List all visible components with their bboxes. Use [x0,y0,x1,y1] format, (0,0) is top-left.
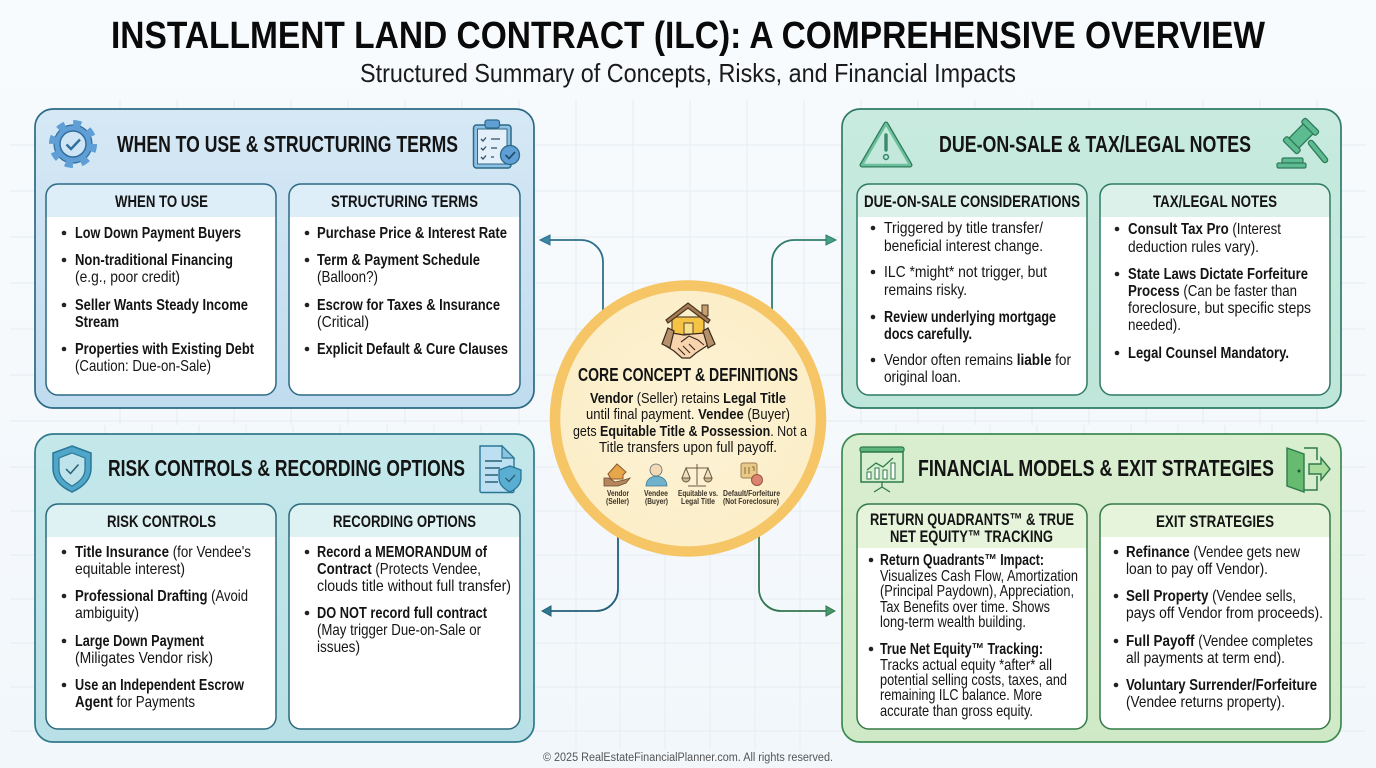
bullet list: Legal Counsel Mandatory. [1128,345,1289,362]
card: return quadrants and true net equity tracking [857,504,1087,729]
card heading: RECORDING OPTIONS [333,512,476,531]
bullet list: pays off Vendor from proceeds). [1126,605,1323,622]
bullet list [869,552,1078,720]
bullet list: Vendor often remains liable for [884,352,1071,369]
card: when to use [46,184,276,395]
card heading: TAX/LEGAL NOTES [1153,192,1277,211]
bullet list [305,225,508,358]
bullet list: Explicit Default & Cure Clauses [317,341,508,358]
icon: warning triangle [862,124,910,165]
card heading [870,510,1074,546]
bullet list: Seller Wants Steady Income [75,297,248,314]
bullet list: (Balloon?) [317,269,378,286]
card: recording options [289,504,520,729]
bullet list [1115,221,1311,362]
icon: shield with check [53,446,91,492]
bullet list: Contract (Protects Vendee, [317,561,481,578]
definition text [573,391,808,456]
arrow: core to financial models [759,530,835,616]
bullet list: Triggered by title transfer/ [884,220,1044,237]
bullet list [1114,544,1323,711]
bullet list: Use an Independent Escrow [75,677,245,694]
card: structuring terms [289,184,520,395]
bullet list: Stream [75,314,119,331]
bullet list: Agent for Payments [75,694,195,711]
bullet list: Term & Payment Schedule [317,252,480,269]
label: vendor [606,489,629,506]
panel: when to use and structuring terms [35,109,534,408]
bullet list: Review underlying mortgage [884,309,1056,326]
icon: document with shield [480,446,521,492]
definition text: Vendor (Seller) retains Legal Title [590,391,786,407]
bullet list: (May trigger Due-on-Sale or [317,622,481,639]
bullet list: (Vendee returns property). [1126,694,1285,711]
label: vendee: Vendee [644,489,669,498]
bullet list: State Laws Dictate Forfeiture [1128,266,1308,283]
card: tax/legal notes [1100,184,1330,395]
bullet list: Non-traditional Financing [75,252,233,269]
footer: © 2025 RealEstateFinancialPlanner.com. All rights reserved. [543,752,833,764]
definition text: until final payment. Vendee (Buyer) [586,407,790,423]
label: equitable vs legal title: Equitable vs. [678,489,718,498]
icon: scales [682,464,712,486]
definition text: Title transfers upon full payoff. [599,440,777,456]
definition text: gets Equitable Title & Possession. Not a [573,424,808,440]
bullet list: (e.g., poor credit) [75,269,180,286]
bullet list: long-term wealth building. [880,614,1026,631]
card heading: WHEN TO USE [115,192,208,211]
arrow: core to when to use [540,235,603,312]
bullet list [62,225,255,375]
bullet list: beneficial interest change. [884,238,1043,255]
bullet list: Title Insurance (for Vendee's [75,544,251,561]
bullet list: all payments at term end). [1126,650,1285,667]
bullet list: Return Quadrants™ Impact: [880,552,1044,569]
label: equitable vs legal title: Legal Title [681,497,716,506]
card heading: STRUCTURING TERMS [331,192,478,211]
bullet list: remains risky. [884,282,967,299]
heading: DUE-ON-SALE & TAX/LEGAL NOTES [939,131,1251,157]
bullet list: (Critical) [317,314,369,331]
bullet list: (Principal Paydown), Appreciation, [880,583,1074,600]
bullet list: Process (Can be faster than [1128,283,1297,300]
bullet list: Full Payoff (Vendee completes [1126,633,1313,650]
bullet list: Tax Benefits over time. Shows [880,599,1050,616]
card: exit strategies [1100,504,1330,729]
bullet list: Escrow for Taxes & Insurance [317,297,500,314]
panel: core concept and definitions [555,286,821,552]
bullet list: Tracks actual equity *after* all [880,657,1052,674]
bullet list [871,220,1071,386]
arrow: core to risk controls [542,530,618,616]
label: vendee [644,489,669,506]
panel: financial models and exit strategies [842,434,1341,742]
bullet list: True Net Equity™ Tracking: [880,641,1043,658]
bullet list: deduction rules vary). [1128,239,1259,256]
icon: gear with check [52,123,94,165]
icon: presentation board with chart [860,447,904,492]
bullet list: needed). [1128,317,1181,334]
bullet list: ambiguity) [75,605,139,622]
bullet list: (Caution: Due-on-Sale) [75,358,211,375]
label: default and forfeiture: Default/Forfeiture [723,489,781,498]
icon: gavel [1277,118,1325,168]
label: default and forfeiture [723,489,781,506]
label: vendor: (Seller) [606,497,629,506]
bullet list: Record a MEMORANDUM of [317,544,488,561]
card: risk controls [46,504,276,729]
card: due-on-sale considerations [857,184,1087,395]
heading: FINANCIAL MODELS & EXIT STRATEGIES [918,455,1274,481]
heading: RISK CONTROLS & RECORDING OPTIONS [108,455,465,481]
bullet list: docs carefully. [884,326,972,343]
icon: vendee [646,464,667,486]
card heading: DUE-ON-SALE CONSIDERATIONS [864,192,1080,211]
icon: default and forfeiture [741,463,762,486]
label: equitable vs legal title [678,489,718,506]
heading: WHEN TO USE & STRUCTURING TERMS [117,131,458,157]
icon: exit door with arrow [1287,448,1330,492]
bullet list [62,544,251,711]
bullet list: Professional Drafting (Avoid [75,588,248,605]
bullet list: foreclosure, but specific steps [1128,300,1311,317]
panel: due-on-sale and tax/legal notes [842,109,1341,408]
bullet list: Large Down Payment [75,633,205,650]
card heading: EXIT STRATEGIES [1156,512,1274,531]
icon: house with handshake [662,303,715,358]
bullet list: Purchase Price & Interest Rate [317,225,507,242]
icon: vendor [604,464,630,486]
card heading: NET EQUITY™ TRACKING [890,527,1053,546]
heading: CORE CONCEPT & DEFINITIONS [578,364,798,385]
bullet list: loan to pay off Vendor). [1126,561,1268,578]
bullet list: Refinance (Vendee gets new [1126,544,1300,561]
bullet list: issues) [317,639,360,656]
subtitle: Structured Summary of Concepts, Risks, and Financial Impacts [360,58,1016,88]
bullet list: Consult Tax Pro (Interest [1128,221,1282,238]
bullet list: Properties with Existing Debt [75,341,255,358]
bullet list: potential selling costs, taxes, and [880,672,1067,689]
bullet list: (Miligates Vendor risk) [75,650,213,667]
label: default and forfeiture: (Not Foreclosure) [723,497,779,506]
card heading: RISK CONTROLS [107,512,216,531]
icon: clipboard with check [474,120,520,168]
arrow: core to due-on-sale [772,235,836,312]
bullet list: Sell Property (Vendee sells, [1126,588,1296,605]
bullet list: DO NOT record full contract [317,605,488,622]
bullet list: original loan. [884,369,961,386]
bullet list [305,544,511,656]
card heading: RETURN QUADRANTS™ & TRUE [870,510,1074,529]
bullet list: remaining ILC balance. More [880,687,1042,704]
bullet list: Visualizes Cash Flow, Amortization [880,568,1078,585]
bullet list: accurate than gross equity. [880,703,1033,720]
panel: risk controls and recording options [35,434,534,742]
bullet list: ILC *might* not trigger, but [884,264,1048,281]
bullet list: Low Down Payment Buyers [75,225,241,242]
label: vendor: Vendor [607,489,629,498]
label: vendee: (Buyer) [645,497,668,506]
bullet list: Voluntary Surrender/Forfeiture [1126,677,1317,694]
bullet list: equitable interest) [75,561,185,578]
bullet list: clouds title without full transfer) [317,578,511,595]
